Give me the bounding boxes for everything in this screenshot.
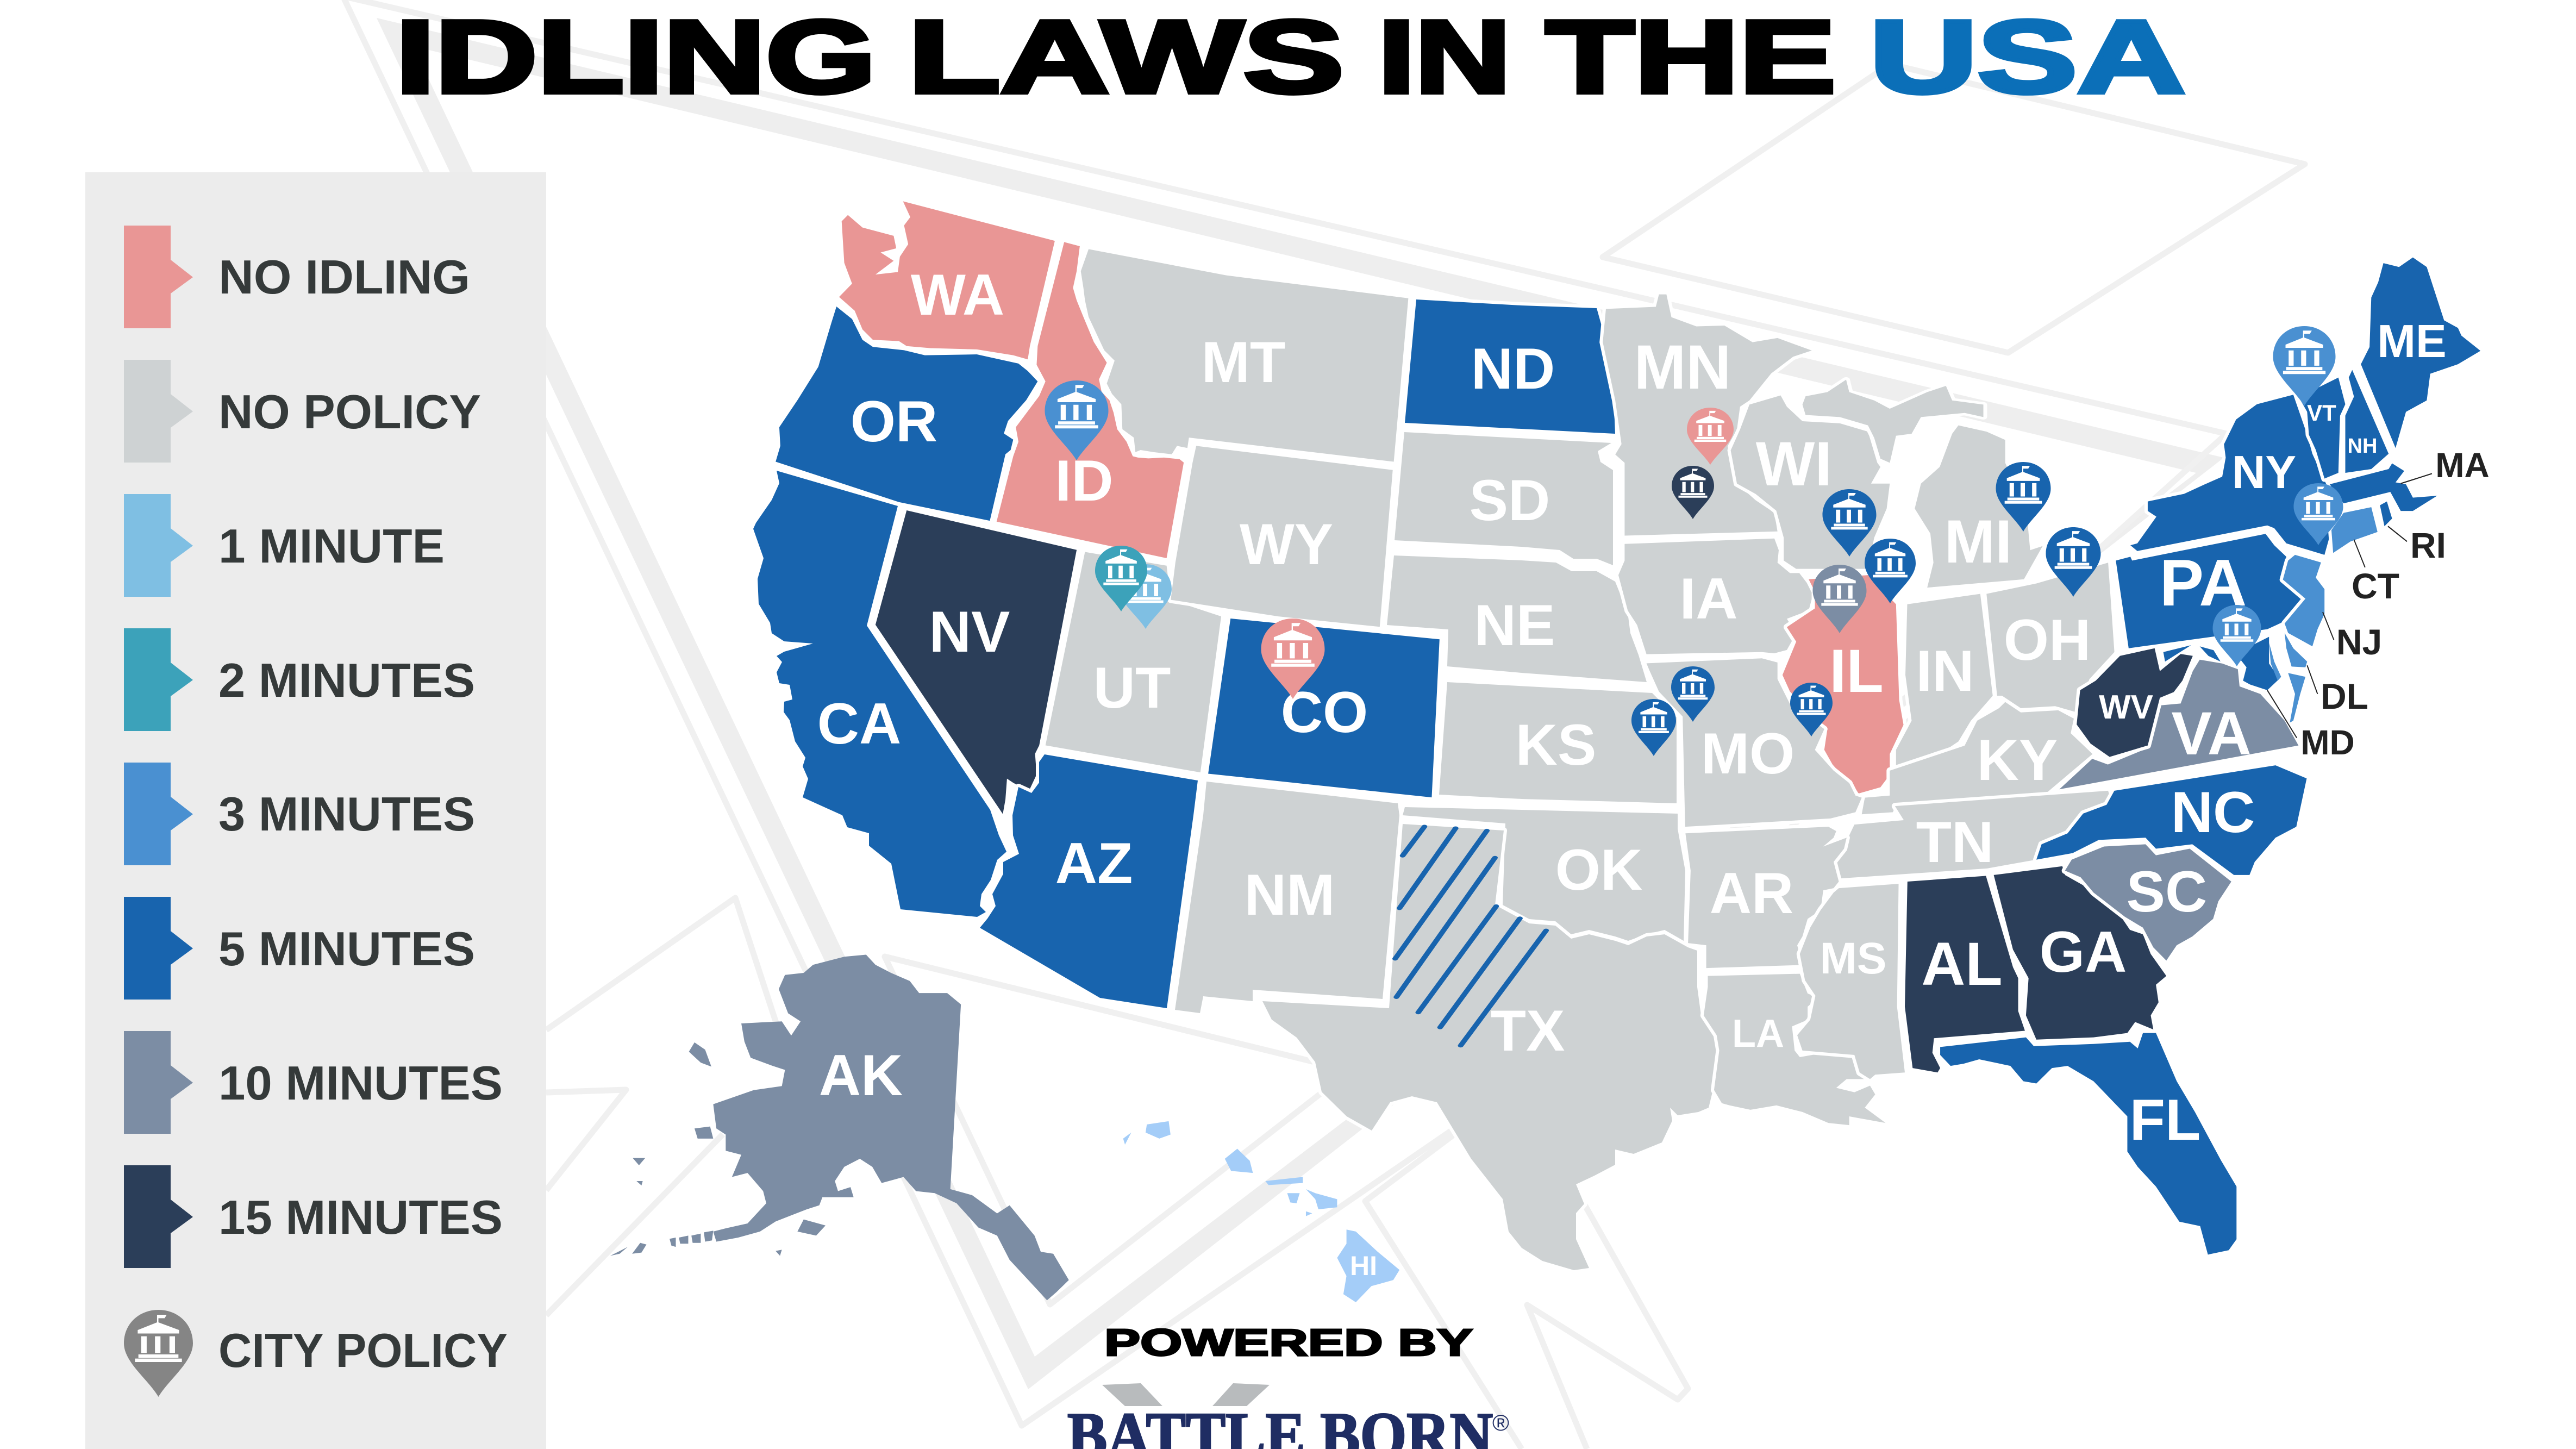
state labels: OR xyxy=(851,389,937,454)
state labels: ID xyxy=(1055,448,1113,513)
legend: 5 minutes xyxy=(124,897,475,1000)
legend: no idling xyxy=(124,226,470,328)
legend: 1 minute: 1 MINUTE xyxy=(218,519,445,573)
legend: no policy: NO POLICY xyxy=(218,385,481,439)
state labels: MO xyxy=(1701,721,1795,786)
state: Kansas xyxy=(1439,682,1677,803)
legend: no policy xyxy=(124,360,481,463)
state labels: VA xyxy=(2171,699,2252,767)
title: THE xyxy=(1546,0,1836,115)
legend: city policy: CITY POLICY xyxy=(218,1323,508,1377)
legend: 2 minutes xyxy=(124,628,475,731)
state labels: IA xyxy=(1679,566,1738,631)
state: West Virginia xyxy=(2077,648,2193,757)
background logo lines xyxy=(343,0,2305,1449)
state: Montana xyxy=(1081,249,1408,461)
small state callouts: RI xyxy=(2410,525,2446,565)
title: IDLING xyxy=(396,0,876,115)
state labels: AZ xyxy=(1055,830,1133,896)
state: Kentucky xyxy=(1862,702,2092,814)
state: Vermont xyxy=(2298,378,2345,479)
legend: 15 minutes: 15 MINUTES xyxy=(218,1190,503,1244)
state labels: WA xyxy=(911,262,1004,327)
state labels: NC xyxy=(2171,779,2255,845)
state: Florida xyxy=(1940,1033,2236,1254)
state: Wisconsin xyxy=(1731,396,1890,569)
state: Nevada xyxy=(876,510,1077,814)
state: Delaware xyxy=(2285,633,2307,667)
state labels: WI xyxy=(1756,429,1832,499)
legend: 15 minutes xyxy=(124,1165,503,1268)
state labels: HI xyxy=(1350,1251,1377,1281)
state: Washington xyxy=(839,201,1055,359)
state: North Carolina xyxy=(2036,765,2306,875)
state labels xyxy=(817,262,2447,1281)
state labels: NE xyxy=(1474,592,1555,658)
state labels: KS xyxy=(1516,712,1596,777)
state labels: NY xyxy=(2232,447,2296,498)
state labels: MT xyxy=(1202,329,1285,395)
state labels: SC xyxy=(2127,859,2207,924)
state labels: OH xyxy=(2004,607,2091,672)
state labels: PA xyxy=(2160,546,2247,620)
state: Utah xyxy=(1046,552,1221,772)
state labels: ME xyxy=(2377,316,2447,367)
state labels: VT xyxy=(2307,400,2336,426)
powered by heading: POWERED BY xyxy=(1104,1321,1473,1364)
state: Maine xyxy=(2361,258,2480,448)
state labels: MI xyxy=(1944,508,2012,576)
state: Arizona xyxy=(980,754,1198,1008)
state: Alabama xyxy=(1905,876,2025,1072)
state: Georgia xyxy=(1994,866,2166,1040)
state: Idaho xyxy=(997,242,1184,558)
state labels: OK xyxy=(1555,837,1642,902)
state: Arkansas xyxy=(1685,827,1847,968)
legend: 5 minutes: 5 MINUTES xyxy=(218,922,475,976)
state: Oregon xyxy=(776,307,1037,521)
map: northeastern states xyxy=(2059,258,2480,789)
state labels: MS xyxy=(1820,934,1887,983)
state: New Mexico xyxy=(1175,782,1399,1013)
legend: 1 minute xyxy=(124,494,445,597)
state: South Carolina xyxy=(2065,844,2231,960)
state: Nebraska xyxy=(1387,555,1647,682)
state: Colorado xyxy=(1208,619,1440,797)
state labels: IN xyxy=(1916,638,1974,703)
state: Alaska xyxy=(610,955,1069,1300)
state labels: KY xyxy=(1977,727,2058,792)
state labels: GA xyxy=(2040,919,2127,984)
legend: city policy xyxy=(124,1310,508,1397)
state: New Hampshire xyxy=(2345,370,2389,473)
legend: 3 minutes xyxy=(124,763,475,865)
state labels: WV xyxy=(2099,689,2153,726)
legend: 10 minutes: 10 MINUTES xyxy=(218,1056,503,1110)
state labels: NM xyxy=(1245,862,1335,927)
state labels: CO xyxy=(1281,679,1368,745)
Texas panhandle hatch xyxy=(1395,827,1546,1046)
title: LAWS xyxy=(908,0,1344,115)
state labels: AL xyxy=(1921,930,2003,998)
title: IN xyxy=(1378,0,1511,115)
state: South Dakota xyxy=(1395,432,1613,565)
state: New York xyxy=(2130,395,2340,555)
small state callouts: NJ xyxy=(2336,622,2382,662)
state labels: TN xyxy=(1916,809,1993,875)
state labels: NV xyxy=(929,599,1010,664)
state: Ohio xyxy=(1986,563,2115,713)
state: Mississippi xyxy=(1797,884,1905,1079)
Maryland eastern shore xyxy=(2269,642,2305,722)
state labels: TX xyxy=(1491,998,1565,1063)
state: North Dakota xyxy=(1405,299,1615,434)
state labels: ND xyxy=(1471,336,1555,401)
state: California xyxy=(753,471,1006,917)
small state callouts: MD xyxy=(2300,723,2355,762)
state: Texas xyxy=(1262,824,1720,1270)
state: Missouri xyxy=(1647,658,1862,827)
small state callouts: MA xyxy=(2435,446,2490,485)
state labels: FL xyxy=(2130,1087,2200,1152)
state: Massachusetts xyxy=(2330,463,2437,511)
state labels: CA xyxy=(817,691,901,756)
legend: 2 minutes: 2 MINUTES xyxy=(218,653,475,707)
legend: no idling: NO IDLING xyxy=(218,250,470,304)
legend: 3 minutes: 3 MINUTES xyxy=(218,787,475,841)
state labels: MN xyxy=(1634,333,1731,402)
state labels: LA xyxy=(1732,1012,1784,1055)
state: Pennsylvania xyxy=(2116,534,2305,648)
state: Minnesota xyxy=(1603,295,1812,535)
state: Virginia xyxy=(2059,660,2298,789)
state labels: AR xyxy=(1710,860,1793,926)
map: Alaska, Hawaii and Texas hatch xyxy=(610,827,1546,1302)
state labels: WY xyxy=(1240,511,1333,577)
state: Indiana xyxy=(1896,594,1993,766)
logo: Battle Born: ® xyxy=(1492,1410,1509,1435)
state labels: SD xyxy=(1470,467,1550,533)
state: Rhode Island xyxy=(2380,502,2392,526)
panel: legend xyxy=(85,172,546,1449)
title: USA xyxy=(1870,0,2185,115)
state: Tennessee xyxy=(1834,791,2112,878)
small state callouts: CT xyxy=(2352,566,2399,606)
state: Maryland xyxy=(2164,637,2279,690)
state: Iowa xyxy=(1618,539,1814,654)
map: southern states xyxy=(1685,765,2306,1254)
city policy pins xyxy=(1045,326,2343,756)
state labels: IL xyxy=(1829,637,1884,705)
small state callouts: DL xyxy=(2321,676,2368,716)
state: Illinois xyxy=(1783,575,1904,794)
state labels: UT xyxy=(1093,655,1171,720)
state: Michigan xyxy=(1803,379,2043,588)
legend: 10 minutes xyxy=(124,1031,503,1134)
state labels: AK xyxy=(819,1042,903,1108)
state: Louisiana xyxy=(1704,974,1886,1125)
state: Hawaii xyxy=(1123,1121,1399,1302)
small state callouts xyxy=(2300,446,2490,762)
map: midwest states xyxy=(1603,295,2115,827)
leader lines xyxy=(2267,473,2432,738)
title xyxy=(396,0,2185,115)
state labels: NH xyxy=(2348,435,2377,458)
state: New Jersey xyxy=(2283,555,2324,646)
state: Connecticut xyxy=(2331,507,2378,553)
map: western states xyxy=(776,201,1440,814)
state: Oklahoma xyxy=(1403,807,1685,941)
state: Wyoming xyxy=(1171,446,1393,627)
